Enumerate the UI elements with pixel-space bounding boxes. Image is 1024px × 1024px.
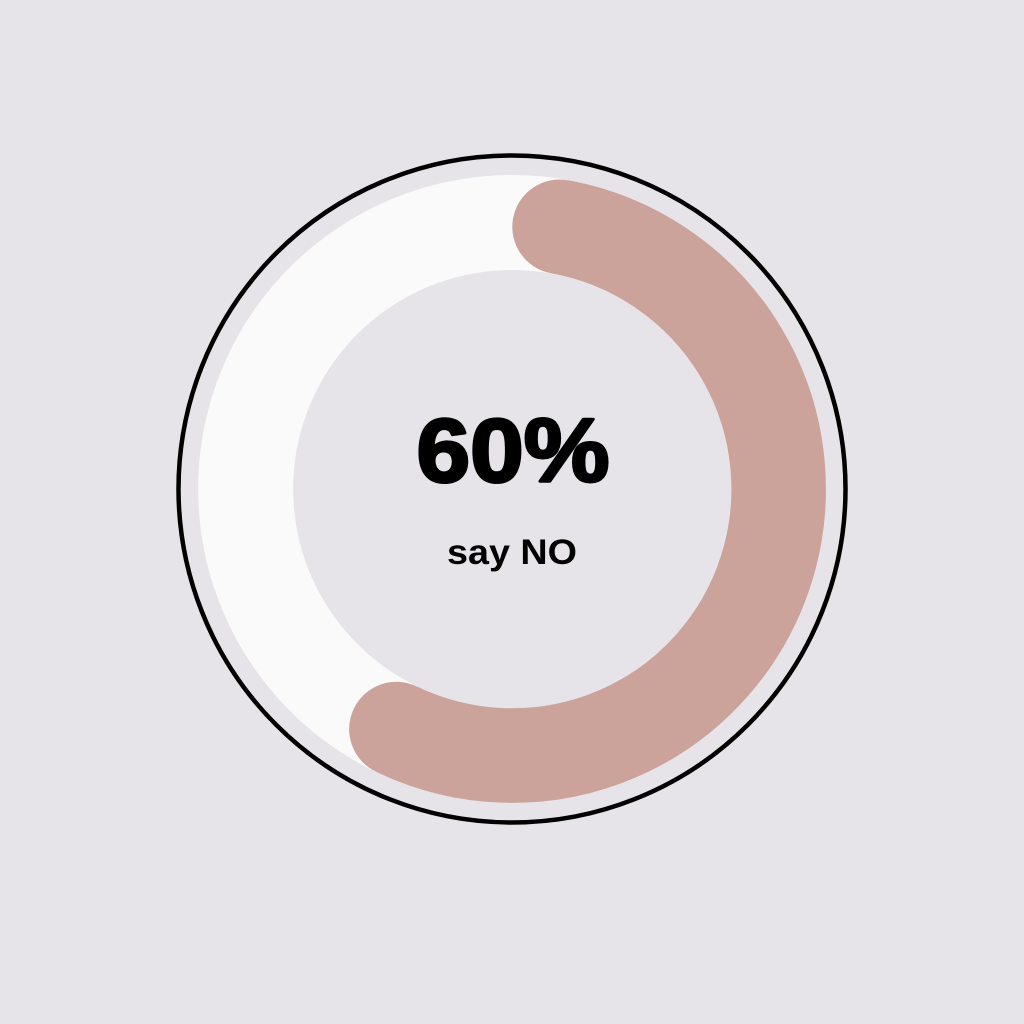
caption: say NO <box>447 533 577 572</box>
donut track: white remainder <box>246 223 560 729</box>
donut arc: 60% segment <box>396 227 779 756</box>
outer black ring outline <box>178 156 846 822</box>
percentage value: 60% <box>416 402 610 502</box>
